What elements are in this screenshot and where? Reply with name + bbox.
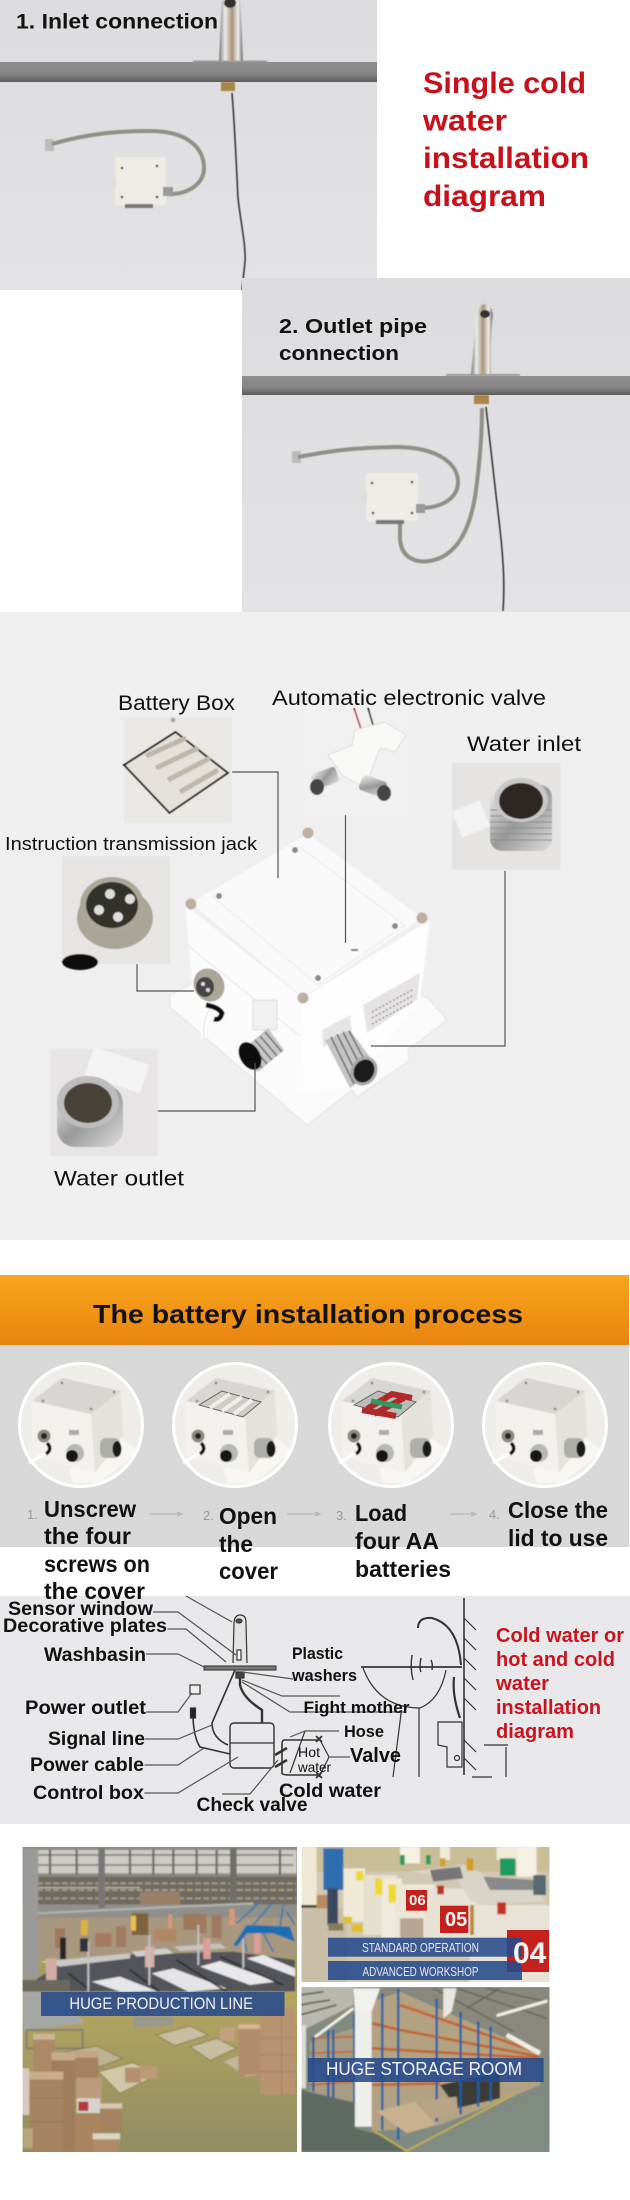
step 4 caption: Close the bbox=[508, 1497, 608, 1523]
brass fitting and signal wire bbox=[221, 82, 245, 290]
photo: water inlet bbox=[452, 763, 560, 870]
diagram part labels: Hose bbox=[344, 1722, 384, 1741]
diagram part labels: Control box bbox=[33, 1783, 144, 1804]
diagram part labels: Washbasin bbox=[44, 1645, 146, 1666]
step captions bbox=[44, 1496, 608, 1604]
photo: standard operation advanced workshop: STANDARD OPERATION bbox=[362, 1940, 479, 1955]
heading: single cold water installation diagram: water bbox=[422, 104, 507, 138]
diagram part labels: Power cable bbox=[30, 1755, 144, 1776]
leader lines bbox=[144, 1596, 404, 1794]
step 2 caption: the bbox=[219, 1531, 253, 1557]
step 3 caption: batteries bbox=[355, 1556, 451, 1582]
photo: huge production line bbox=[20, 1845, 300, 2155]
counter shelf bbox=[0, 62, 377, 82]
step 1 caption: screws on bbox=[44, 1551, 150, 1577]
step 2 caption: cover bbox=[219, 1558, 278, 1584]
photo: huge storage room bbox=[300, 1987, 552, 2153]
heading: single cold water installation diagram bbox=[422, 67, 589, 213]
photo: 2. outlet pipe connection bbox=[242, 278, 630, 612]
diagram part labels: Cold water bbox=[279, 1781, 382, 1802]
numbered plates bbox=[406, 1890, 549, 1972]
label: automatic electronic valve: Automatic electronic valve bbox=[272, 687, 546, 710]
diagram part labels: Plastic bbox=[292, 1644, 343, 1663]
diagram part labels: Power outlet bbox=[25, 1698, 147, 1719]
step 4 caption bbox=[508, 1497, 608, 1551]
step 1 image bbox=[20, 1364, 142, 1486]
outlet thread bbox=[240, 1028, 284, 1072]
brass fitting and wire bbox=[474, 395, 504, 611]
step 3 caption: four AA bbox=[355, 1528, 439, 1554]
control box bbox=[362, 473, 425, 524]
step 2 caption bbox=[219, 1503, 278, 1584]
step 3 caption: Load bbox=[355, 1500, 407, 1526]
diagram part labels: Fight mother bbox=[304, 1698, 410, 1717]
label: water outlet: Water outlet bbox=[54, 1168, 184, 1190]
hot water label bbox=[297, 1744, 331, 1775]
step numbers: 4. bbox=[489, 1507, 500, 1522]
hot water label: water bbox=[297, 1759, 331, 1775]
red diagram heading: installation bbox=[496, 1697, 601, 1719]
step 1 caption: the four bbox=[44, 1523, 131, 1549]
diagram part labels: Check valve bbox=[196, 1795, 308, 1816]
red diagram heading bbox=[495, 1625, 624, 1743]
faucet body bbox=[193, 0, 267, 62]
label: water inlet: Water inlet bbox=[467, 733, 581, 756]
heading: single cold water installation diagram: diagram bbox=[423, 180, 546, 213]
diagram part labels: Signal line bbox=[48, 1729, 145, 1750]
step 2 image bbox=[174, 1364, 296, 1486]
step 2 caption: Open bbox=[219, 1503, 277, 1529]
photo: automatic electronic valve bbox=[305, 708, 413, 815]
step numbers: 1. bbox=[27, 1507, 38, 1522]
diagram part labels: Valve bbox=[350, 1745, 401, 1767]
photo: huge storage room: HUGE STORAGE ROOM bbox=[326, 2059, 522, 2079]
label: outlet pipe connection bbox=[279, 316, 427, 365]
photo: standard operation advanced workshop: 06 bbox=[409, 1892, 426, 1909]
stickers bbox=[253, 1000, 277, 1030]
counter shelf bbox=[242, 376, 630, 395]
banner: the battery installation process bbox=[0, 1275, 629, 1345]
step 3 caption bbox=[355, 1500, 451, 1582]
caption bar: huge production line bbox=[41, 1992, 284, 2016]
photo: water outlet bbox=[50, 1047, 158, 1156]
step numbers: 3. bbox=[336, 1508, 347, 1523]
photo: standard operation advanced workshop bbox=[300, 1845, 552, 1985]
control box 3D view bbox=[170, 828, 447, 1125]
left faucet schematic bbox=[190, 1615, 329, 1778]
diagram part labels bbox=[3, 1599, 410, 1816]
label: instruction transmission jack: Instruction transmission jack bbox=[5, 834, 258, 854]
inlet and outlet hoses bbox=[292, 408, 482, 561]
diagram part labels: Decorative plates bbox=[3, 1616, 167, 1637]
photo: instruction transmission jack bbox=[62, 856, 170, 970]
step 3 image bbox=[330, 1364, 452, 1486]
panel: battery process steps bbox=[0, 1345, 629, 1547]
step 1 caption: Unscrew bbox=[44, 1496, 136, 1522]
power socket and cable bbox=[190, 1685, 200, 1694]
step 4 image bbox=[484, 1364, 606, 1486]
inlet hose bbox=[45, 131, 204, 194]
photo: 1. inlet connection bbox=[0, 0, 377, 290]
hot water label: Hot bbox=[298, 1744, 320, 1760]
red diagram heading: water bbox=[495, 1673, 549, 1695]
photo: standard operation advanced workshop: ADVANCED WORKSHOP bbox=[362, 1964, 478, 1979]
photo: standard operation advanced workshop: 04 bbox=[513, 1937, 547, 1970]
caption bar: storage room bbox=[308, 2058, 544, 2082]
panel: product parts bbox=[0, 612, 630, 1240]
caption bars bbox=[328, 1938, 522, 1957]
red diagram heading: diagram bbox=[496, 1721, 574, 1743]
connector lines bbox=[137, 772, 505, 1111]
control box sketch bbox=[230, 1723, 274, 1768]
control box bbox=[111, 157, 173, 208]
photo: huge production line: HUGE PRODUCTION LINE bbox=[69, 1994, 253, 2013]
panel: installation line diagram bbox=[0, 1596, 630, 1824]
faucet bbox=[446, 304, 520, 376]
red diagram heading: Cold water or bbox=[496, 1625, 624, 1647]
photo: standard operation advanced workshop: 05 bbox=[445, 1909, 467, 1931]
inlet thread bbox=[325, 1030, 378, 1088]
banner: the battery installation process: The battery installation process bbox=[93, 1299, 523, 1329]
label: outlet pipe connection: 2. Outlet pipe bbox=[279, 316, 427, 338]
diagram part labels: Sensor window bbox=[8, 1599, 153, 1620]
step 4 caption: lid to use bbox=[508, 1525, 608, 1551]
right basin schematic bbox=[361, 1598, 508, 1777]
label: inlet connection: 1. Inlet connection bbox=[16, 10, 218, 34]
step numbers bbox=[27, 1507, 500, 1523]
step 1 caption: the cover bbox=[44, 1578, 145, 1604]
step 1 caption bbox=[44, 1496, 150, 1604]
base plate bbox=[170, 983, 447, 1125]
heading: single cold water installation diagram: installation bbox=[423, 142, 589, 175]
step numbers: 2. bbox=[203, 1508, 214, 1523]
step arrows bbox=[149, 1512, 476, 1516]
photo: battery box bbox=[124, 717, 232, 823]
water pipes and valves bbox=[282, 1740, 319, 1775]
diagram part labels: washers bbox=[291, 1666, 357, 1685]
label: battery box: Battery Box bbox=[118, 692, 236, 715]
red diagram heading: hot and cold bbox=[496, 1649, 615, 1671]
label: outlet pipe connection: connection bbox=[279, 343, 399, 365]
heading: single cold water installation diagram: Single cold bbox=[423, 67, 586, 100]
